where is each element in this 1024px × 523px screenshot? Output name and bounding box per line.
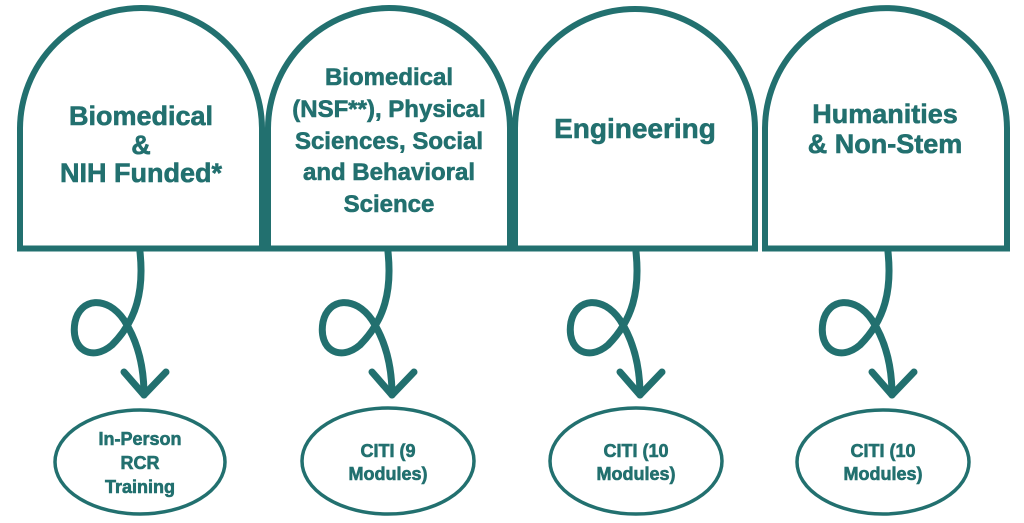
oval: In-Person RCR Training: Training [105,477,175,497]
arrow: loop 3 [570,252,662,395]
oval: CITI (10 Modules) engineering [550,408,722,514]
oval: In-Person RCR Training: RCR [120,453,160,473]
arrow: loop 2 [322,252,414,395]
heading: Biomedical NSF etc: Science [344,191,434,218]
oval: CITI (10 Modules) humanities: Modules) [844,464,923,484]
heading: Biomedical NSF etc: and Behavioral [303,159,475,186]
oval: CITI (10 Modules) engineering: Modules) [596,464,676,484]
oval: CITI (9 Modules): Modules) [348,464,428,484]
heading: Biomedical & NIH Funded: & [131,130,151,160]
heading: Biomedical NSF etc: Biomedical [325,64,453,91]
panel: Engineering [515,9,755,248]
heading: Biomedical & NIH Funded [60,101,222,188]
oval: CITI (9 Modules) [302,408,474,514]
oval: CITI (10 Modules) humanities [797,410,969,514]
heading: Biomedical & NIH Funded: NIH Funded* [60,158,222,188]
panel: Humanities & Non-Stem [765,8,1007,248]
arrow: loop 4 [822,252,914,395]
oval: In-Person RCR Training: In-Person [98,429,182,449]
heading: Biomedical NSF etc: (NSF**), Physical [292,96,486,123]
heading: Biomedical NSF etc [292,64,486,218]
panel: Biomedical & NIH Funded [20,8,262,248]
oval: CITI (10 Modules) engineering: CITI (10 [603,441,669,461]
heading: Humanities & Non-Stem: Humanities [812,99,958,129]
heading: Engineering: Engineering [554,113,716,144]
oval: CITI (10 Modules) humanities: CITI (10 [850,441,916,461]
panel: Biomedical NSF, Physical, Social and Behavioral Science [268,8,510,249]
heading: Humanities & Non-Stem [808,99,962,159]
heading: Biomedical & NIH Funded: Biomedical [69,101,213,131]
oval: In-Person RCR Training [55,410,225,514]
oval: CITI (9 Modules): CITI (9 [360,441,416,461]
heading: Biomedical NSF etc: Sciences, Social [295,128,483,155]
heading: Humanities & Non-Stem: & Non-Stem [808,129,962,159]
arrow: loop 1 [74,252,166,395]
